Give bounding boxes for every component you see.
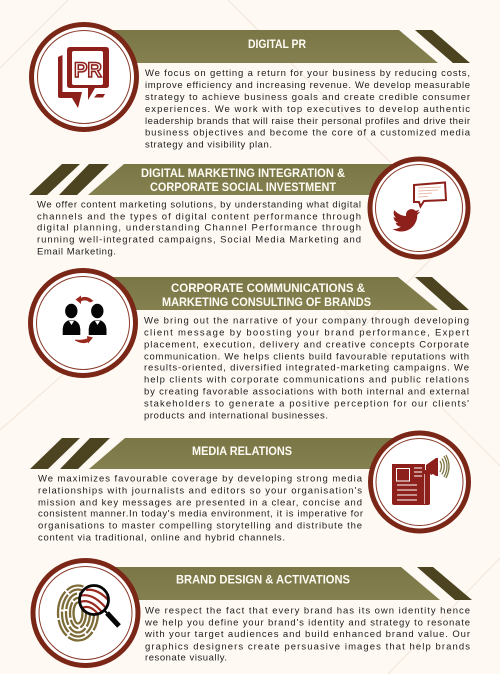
stripes [30,438,110,469]
heading: brand design: BRAND DESIGN & ACTIVATIONS [176,574,350,586]
banner: digital pr [110,30,438,63]
stripes [29,164,109,195]
text: corporate communications: We bring out the narrative of your company through developing [144,315,469,326]
text: digital marketing: digital planning, understanding Channel Performance through [37,223,361,234]
text: digital pr: strategy and visibility plan. [145,140,272,150]
text: brand design: with your target audiences and build enhanced brand value. Our [144,629,470,640]
text: media relations: We maximizes favourable coverage by developing strong media [38,473,363,484]
icon: newspaper and megaphone [392,455,449,505]
badge ring [33,560,138,666]
badge ring [32,24,136,130]
text: digital marketing: We offer content marketing solutions, by understanding what digital [37,199,361,210]
badge ring [370,433,468,531]
badge ring [30,270,136,376]
banner: brand design [112,567,440,600]
text: brand design: we help you define your brand's identity and strategy to resonate [144,617,470,628]
text: corporate communications [144,315,469,421]
text: corporate communications: results-oriented, diversified integrated-marketing campaigns. We [144,362,469,373]
banner: media relations [89,438,400,469]
text: digital pr: experiences. We work with top executives to develop authentic [145,104,470,115]
icon: pr speech bubbles [58,47,109,108]
text: corporate communications: by creating favorable associations with both internal and external [144,386,469,397]
stripe [417,567,472,600]
banner: digital marketing [88,164,400,195]
text: media relations: mission and key messages are presented in a clear, concise and [38,497,362,508]
icon: two people with exchange arrows [63,296,106,344]
icon: twitter bird with speech bubble [392,182,446,232]
heading: corporate communications [162,283,371,309]
panel: media relations [30,433,468,543]
text: digital pr [145,68,471,150]
text: digital marketing: running well-integrated campaigns, Social Media Marketing and [37,234,361,245]
icon: pr speech bubbles: PR [74,59,102,82]
text: digital marketing: Email Marketing. [37,246,116,257]
text: corporate communications: help clients with corporate communications and public relations [144,374,469,385]
panel: brand design and activations [33,560,472,666]
heading: digital marketing: CORPORATE SOCIAL INVESTMENT [150,182,336,194]
text: digital pr: We focus on getting a return for your business by reducing costs, [145,68,470,79]
text: media relations: relationships with journalists and editors so your organisation's [38,486,362,497]
banner: corporate communications [110,277,438,310]
text: digital pr: improve efficiency and increasing revenue. We develop measurable [145,80,470,91]
text: media relations: organisations to master compelling storytelling and distribute the [38,520,362,531]
text: corporate communications: client message by boosting your brand performance, Expert [144,327,469,338]
panel: digital pr [32,24,471,150]
text: brand design: We respect the fact that every brand has its own identity hence [145,605,470,616]
text: digital pr: strategy to achieve business goals and create credible consumer [145,92,470,103]
text: digital marketing [37,199,361,257]
heading: digital marketing [141,168,345,194]
heading: corporate communications: MARKETING CONSULTING OF BRANDS [162,297,371,309]
text: corporate communications: placement, execution, delivery and creative concepts Corporate [144,340,469,351]
heading: media relations: MEDIA RELATIONS [192,446,292,458]
text: digital marketing: channels and the types of digital content performance through [37,211,361,222]
panel: digital marketing integration [29,159,468,257]
text: digital pr: business objectives and become the core of a customized media [145,128,471,138]
text: corporate communications: stakeholders to generate a positive perception for our clients' [144,398,469,409]
text: brand design [144,605,470,663]
heading: digital pr: DIGITAL PR [248,39,307,51]
text: corporate communications: products and international businesses. [144,410,328,421]
text: brand design: graphics designers create persuasive images that help brands [145,641,470,652]
heading: corporate communications: CORPORATE COMMUNICATIONS & [171,283,365,295]
text: corporate communications: communication. We helps clients build favourable reputations with [144,351,469,362]
heading: digital marketing: DIGITAL MARKETING INTEGRATION & [141,168,345,180]
text: digital pr: leadership brands that will raise their personal profiles and drive their [145,116,470,127]
stripe [415,30,470,63]
text: media relations: consistent manner.In today's media environment, it is imperative for [38,509,363,520]
badge ring [370,159,468,257]
text: media relations: content via traditional, online and hybrid channels. [38,532,285,543]
panel: corporate communications [30,270,469,421]
text: media relations [38,473,363,543]
icon: fingerprint under magnifier [58,586,119,640]
text: brand design: resonate visually. [145,652,227,663]
stripe [415,277,469,310]
